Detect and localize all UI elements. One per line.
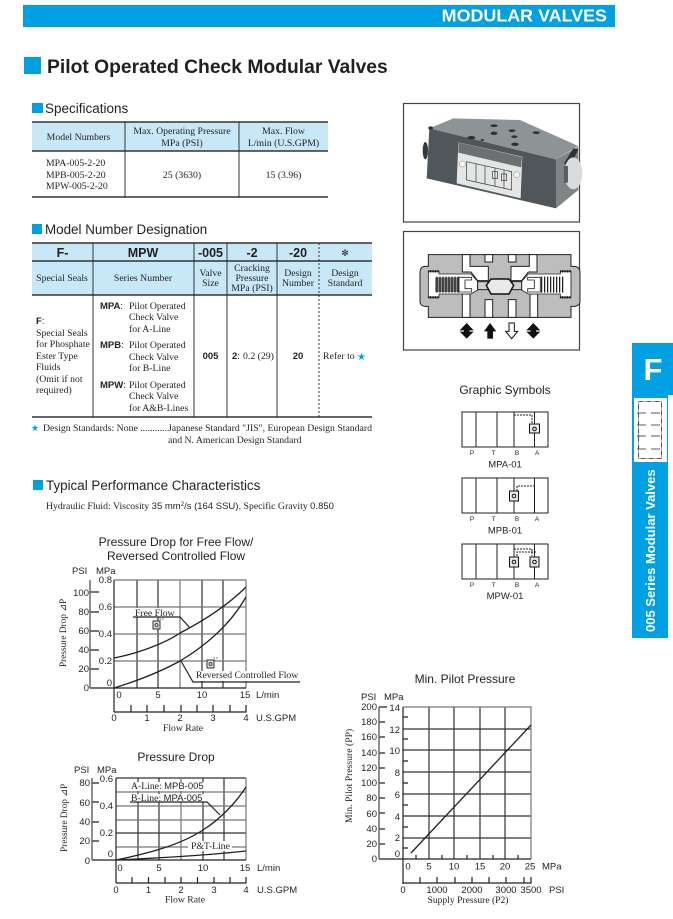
chart: pressure drop for free flow / reversed controlled flow: Flow Rate [163, 723, 203, 734]
chart: min. pilot pressure: 40 [366, 824, 377, 835]
specifications table: Model Numbers [47, 132, 111, 143]
chart: min. pilot pressure: 10 [389, 746, 400, 757]
chart: pressure drop: Pressure Drop ⊿P [60, 784, 70, 852]
chart: pressure drop: 60 [79, 798, 90, 809]
chart: pressure drop: 0.6 [100, 774, 113, 785]
chart: min. pilot pressure: 15 [475, 862, 485, 872]
chart: min. pilot pressure: 60 [366, 809, 377, 820]
chart: pressure drop: L/min [257, 863, 280, 874]
graphic symbol: MPA-01: A [535, 450, 540, 457]
graphic symbol: MPB-01: A [535, 516, 540, 523]
chart: min. pilot pressure: 8 [395, 768, 400, 779]
model number designation table: Pilot Operated [129, 340, 186, 351]
chart: pressure drop for free flow / reversed controlled flow: 10 [197, 690, 207, 701]
header bar: MODULAR VALVES [442, 6, 607, 26]
chart: pressure drop: 0 [108, 849, 113, 860]
model number designation table: MPB: [100, 340, 124, 351]
side tab: series label [632, 395, 668, 638]
chart: min. pilot pressure: 12 [389, 725, 400, 736]
model number designation table: -005 [198, 246, 223, 260]
model number designation table: Special Seals [36, 273, 88, 284]
model number designation table: Pilot Operated [129, 380, 186, 391]
model number designation table: MPW: [100, 380, 126, 391]
chart: pressure drop for free flow / reversed controlled flow: PSI [72, 566, 87, 577]
design standards footnote: Japanese Standard "JIS", European Design Standard [168, 423, 372, 434]
chart: pressure drop: P&T-Line [191, 841, 230, 852]
chart: pressure drop: 4 [243, 885, 249, 896]
chart: pressure drop: 0.2 [100, 828, 113, 839]
chart: pressure drop: 5 [156, 863, 162, 874]
graphic symbol: MPA-01: B [515, 450, 519, 457]
chart: pressure drop for free flow / reversed controlled flow: 40 [78, 645, 89, 656]
chart: pressure drop for free flow / reversed controlled flow: L/min [256, 690, 279, 701]
model number designation table: MPa (PSI) [231, 283, 273, 294]
hydraulic cross-section diagram [404, 232, 580, 350]
design standards footnote: ★ [31, 423, 39, 433]
chart: pressure drop: 2 [178, 885, 184, 896]
hydraulic fluid note: Specific Gravity 0.850 [244, 501, 334, 512]
chart: pressure drop for free flow / reversed controlled flow: Pressure Drop for Free Flow/ [99, 535, 254, 549]
specifications table: 25 (3630) [163, 170, 201, 181]
graphic symbol: MPA-01: T [492, 450, 496, 457]
chart: pressure drop: 0.4 [100, 801, 113, 812]
chart: pressure drop: B-Line: MPA-005 [131, 793, 202, 804]
chart: pressure drop: PSI [74, 765, 89, 776]
chart: pressure drop for free flow / reversed controlled flow: Pressure Drop ⊿P [59, 599, 69, 667]
model number designation table: Check Valve [129, 312, 178, 323]
chart: pressure drop for free flow / reversed controlled flow: 3 [210, 713, 216, 724]
hydraulic fluid note: Hydraulic Fluid: Viscosity 35 mm [46, 501, 181, 512]
chart: pressure drop: 0 [117, 863, 123, 874]
chart: pressure drop for free flow / reversed controlled flow: 0.8 [99, 575, 112, 586]
title: Pilot Operated Check Modular Valves [47, 57, 388, 78]
chart: pressure drop for free flow / reversed controlled flow: Reversed Controlled Flow [196, 670, 298, 681]
model number designation table: Check Valve [129, 391, 178, 402]
chart: min. pilot pressure: 0 [372, 854, 377, 865]
chart: pressure drop: 15 [240, 863, 250, 874]
chart: pressure drop: 0 [113, 885, 119, 896]
heading: model number designation: Model Number Designation [45, 222, 207, 237]
chart: min. pilot pressure: 0 [395, 849, 400, 860]
specifications table: Max. Flow [262, 126, 305, 137]
model number designation table: Special Seals [36, 328, 88, 339]
chart: min. pilot pressure: 6 [395, 790, 400, 801]
chart: min. pilot pressure: 3500 [520, 885, 542, 896]
chart: min. pilot pressure: Min. Pilot Pressure [415, 672, 516, 686]
model number designation table: ★ [357, 352, 366, 363]
chart: pressure drop for free flow / reversed controlled flow: U.S.GPM [256, 713, 296, 724]
model number designation table: Cracking [234, 263, 270, 274]
graphic symbol: MPA-01 [462, 412, 548, 470]
chart: pressure drop for free flow / reversed controlled flow: 4 [243, 713, 249, 724]
chart: pressure drop for free flow / reversed controlled flow: 100 [73, 588, 89, 599]
model number designation table: -2 [246, 246, 258, 260]
graphic symbol: MPW-01: MPW-01 [487, 591, 523, 602]
header bar [23, 5, 615, 27]
chart: min. pilot pressure: 80 [366, 793, 377, 804]
model number designation table [32, 243, 372, 417]
heading: typical performance characteristics: Typical Performance Characteristics [46, 478, 261, 493]
flow direction arrows [460, 323, 540, 339]
specifications table: MPa (PSI) [161, 138, 203, 149]
chart: pressure drop: 80 [79, 778, 90, 789]
chart: pressure drop: Flow Rate [165, 894, 205, 906]
specifications table: MPW-005-2-20 [46, 181, 108, 192]
model number designation table: for B-Line [129, 363, 170, 374]
chart: min. pilot pressure: 5 [426, 862, 432, 872]
chart: pressure drop for free flow / reversed controlled flow: Free Flow [135, 608, 175, 619]
chart: min. pilot pressure: 120 [361, 763, 377, 774]
model number designation table: Pilot Operated [129, 301, 186, 312]
chart: pressure drop for free flow / reversed controlled flow: 60 [78, 626, 89, 637]
model number designation table: F- [57, 246, 68, 260]
chart: pressure drop: U.S.GPM [257, 885, 297, 896]
chart: min. pilot pressure: 1000 [426, 885, 448, 896]
model number designation table: -20 [289, 246, 307, 260]
model number designation table: ✻ [341, 249, 349, 259]
specifications table: L/min (U.S.GPM) [248, 138, 319, 149]
chart: pressure drop for free flow / reversed controlled flow: 15 [240, 690, 250, 701]
side tab: series label: 005 Series Modular Valves [643, 469, 658, 632]
specifications table: 15 (3.96) [266, 170, 301, 181]
graphic symbol: MPW-01: B [515, 582, 519, 589]
chart: min. pilot pressure: 14 [389, 703, 400, 714]
chart: pressure drop: 1 [146, 885, 151, 896]
chart: min. pilot pressure: 10 [449, 862, 459, 872]
design standards footnote [31, 423, 372, 446]
chart: min. pilot pressure [344, 672, 564, 906]
chart: min. pilot pressure: 2 [395, 833, 400, 844]
model number designation table: MPA: [100, 301, 123, 312]
graphic symbol: MPB-01: T [492, 516, 496, 523]
chart: pressure drop for free flow / reversed controlled flow: Reversed Controlled Flow [107, 549, 245, 563]
chart: pressure drop for free flow / reversed controlled flow: 0.6 [99, 602, 112, 613]
chart: pressure drop for free flow / reversed controlled flow: 0 [84, 683, 89, 694]
chart: pressure drop: 10 [198, 863, 208, 874]
design standards footnote: Design Standards: None ........... [43, 423, 167, 434]
hydraulic fluid note: /s (164 SSU), [184, 501, 241, 512]
model number designation table: Valve [199, 268, 222, 279]
model number designation table: 0.2 (29) [243, 351, 274, 362]
chart: min. pilot pressure: 200 [361, 702, 377, 713]
chart: pressure drop for free flow / reversed controlled flow: MPa [96, 566, 116, 577]
chart: min. pilot pressure: MPa [542, 862, 562, 872]
graphic symbol: MPW-01: A [535, 582, 540, 589]
chart: pressure drop for free flow / reversed controlled flow: 80 [78, 607, 89, 618]
chart: min. pilot pressure: 3000 [495, 885, 517, 896]
model number designation table: 2: [232, 351, 240, 362]
side tab: F: F [644, 352, 662, 387]
chart: pressure drop for free flow / reversed controlled flow: 1 [144, 713, 150, 724]
design standards footnote: and N. American Design Standard [168, 435, 302, 446]
model number designation table: required) [36, 385, 72, 396]
chart: min. pilot pressure: 160 [361, 732, 377, 743]
chart: min. pilot pressure: 100 [361, 778, 377, 789]
model number designation table: 20 [293, 351, 303, 362]
chart: pressure drop: A-Line: MPB-005 [131, 781, 204, 792]
chart: pressure drop for free flow / reversed controlled flow [59, 535, 300, 734]
chart: pressure drop for free flow / reversed controlled flow: 5 [155, 690, 161, 701]
chart: pressure drop: 3 [211, 885, 217, 896]
chart: pressure drop: MPa [97, 765, 117, 776]
chart: pressure drop [60, 750, 297, 906]
chart: min. pilot pressure: 180 [361, 717, 377, 728]
chart: min. pilot pressure: 0 [405, 862, 411, 872]
heading: graphic symbols: Graphic Symbols [459, 383, 551, 397]
specifications table: MPB-005-2-20 [46, 170, 106, 181]
graphic symbol: MPB-01: P [470, 516, 474, 523]
chart: min. pilot pressure: 2000 [461, 885, 483, 896]
chart: pressure drop: Pressure Drop [137, 750, 215, 764]
chart: pressure drop: 0 [85, 856, 90, 867]
specifications table: Max. Operating Pressure [133, 126, 231, 137]
model number designation table: Size [202, 278, 219, 289]
chart: min. pilot pressure: 20 [500, 862, 510, 872]
model number designation table: Ester Type [36, 351, 78, 362]
side tab: F [632, 343, 673, 395]
model number designation table: Check Valve [129, 352, 178, 363]
chart: pressure drop for free flow / reversed controlled flow: 0 [116, 690, 122, 701]
hydraulic fluid note: 2 [181, 502, 185, 508]
graphic symbol: MPA-01: P [470, 450, 474, 457]
chart: min. pilot pressure: 140 [361, 748, 377, 759]
graphic symbol: MPB-01: MPB-01 [488, 526, 522, 536]
chart: pressure drop: 20 [79, 836, 90, 847]
chart: pressure drop for free flow / reversed controlled flow: 20 [78, 664, 89, 675]
chart: min. pilot pressure: MPa [384, 692, 404, 703]
chart: min. pilot pressure: PSI [361, 692, 376, 703]
chart: pressure drop for free flow / reversed controlled flow: 0.4 [99, 629, 112, 640]
graphic symbol: MPB-01: B [515, 516, 519, 523]
graphic symbol: MPA-01: MPA-01 [488, 460, 522, 470]
graphic symbol: MPW-01 [462, 544, 548, 602]
chart: min. pilot pressure: Min. Pilot Pressure (PP) [344, 729, 355, 823]
model number designation table: for A-Line [129, 324, 170, 335]
model number designation table: Pressure [235, 273, 269, 284]
specifications table [32, 122, 328, 197]
model number designation table: Refer to [323, 351, 355, 362]
model number designation table: 005 [203, 351, 219, 362]
model number designation table: Design [284, 268, 312, 279]
chart: pressure drop: 40 [79, 817, 90, 828]
graphic symbol: MPW-01: P [470, 582, 474, 589]
model number designation table: Design [331, 268, 359, 279]
model number designation table: Standard [328, 278, 362, 289]
model number designation table: F: [36, 316, 44, 327]
chart: min. pilot pressure: PSI [549, 885, 564, 896]
photo: modular valve [404, 104, 582, 222]
chart: min. pilot pressure: 20 [366, 839, 377, 850]
model number designation table: Fluids [36, 362, 61, 373]
chart: min. pilot pressure: Supply Pressure (P2) [427, 895, 509, 906]
chart: min. pilot pressure: 4 [395, 812, 400, 823]
chart: pressure drop for free flow / reversed controlled flow: 2 [177, 713, 183, 724]
model number designation table: for Phosphate [36, 339, 90, 350]
specifications table: MPA-005-2-20 [46, 158, 105, 169]
model number designation table: Number [282, 278, 315, 289]
chart: pressure drop for free flow / reversed controlled flow: 0 [107, 678, 112, 689]
model number designation table: (Omit if not [36, 374, 83, 385]
chart: min. pilot pressure: 0 [400, 885, 406, 896]
graphic symbol: MPW-01: T [492, 582, 496, 589]
model number designation table: MPW [128, 246, 158, 260]
chart: pressure drop for free flow / reversed controlled flow: 0 [111, 713, 117, 724]
chart: min. pilot pressure: 25 [525, 862, 535, 872]
model number designation table: for A&B-Lines [129, 403, 189, 414]
heading: specifications: Specifications [45, 101, 129, 116]
graphic symbol: MPB-01 [462, 478, 548, 536]
chart: pressure drop for free flow / reversed controlled flow: 0.2 [99, 656, 112, 667]
model number designation table: Series Number [114, 273, 173, 284]
